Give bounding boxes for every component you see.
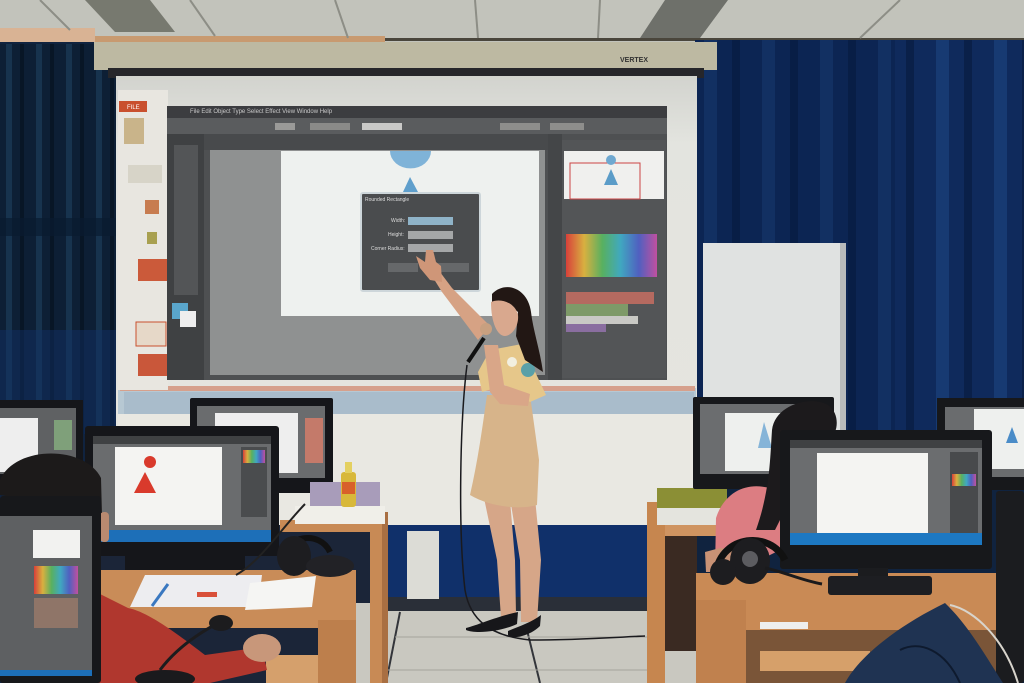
far right monitor <box>937 398 1024 490</box>
power panel on wall <box>407 531 439 599</box>
handheld microphone <box>468 323 492 362</box>
taskbar on screen <box>124 392 694 414</box>
tools panel <box>167 134 204 380</box>
canvas <box>210 150 545 375</box>
dark area under left desks <box>100 525 385 683</box>
legs <box>484 498 516 618</box>
dress <box>470 395 539 507</box>
raised arm <box>432 272 490 340</box>
projector screen housing <box>94 42 717 78</box>
papers on desk <box>130 575 316 610</box>
flip chart board <box>703 243 846 433</box>
microphone cable <box>461 365 645 640</box>
application ribbon <box>118 90 168 390</box>
hair <box>492 287 543 372</box>
hand on screen <box>416 250 442 282</box>
right panels <box>548 134 666 380</box>
water bottle <box>341 462 356 507</box>
headphones right <box>710 538 822 585</box>
swatches <box>566 292 654 332</box>
background monitor left <box>190 398 333 493</box>
right front table <box>696 573 1000 683</box>
color spectrum <box>566 234 657 277</box>
right table back <box>647 488 727 683</box>
rounded rectangle dialog: Corner Radius: <box>371 246 405 252</box>
presenter <box>416 250 645 640</box>
student right <box>705 401 837 572</box>
background monitor right <box>693 397 834 489</box>
front right monitor edge <box>996 491 1024 683</box>
projection screen <box>116 76 697 525</box>
lower curtain under screen <box>385 525 650 603</box>
illustration: red circle and triangle <box>134 456 156 493</box>
illustrator window on screen: File Edit Object Type Select Effect View Window Help <box>190 109 333 115</box>
front-left monitor with red figure <box>85 426 279 570</box>
blue handbag <box>845 603 1018 683</box>
headphones left <box>236 504 354 577</box>
brand label: VERTEX <box>620 57 648 64</box>
left curtain <box>0 44 122 434</box>
shoes <box>466 612 518 632</box>
right curtain <box>695 40 1024 435</box>
slide thumbnails <box>124 118 168 376</box>
ceiling <box>0 0 1024 44</box>
lower arm holding mic <box>484 345 530 406</box>
projection screen: FILE <box>127 105 140 111</box>
left table back <box>280 482 388 683</box>
front-left small monitor <box>0 496 101 683</box>
navigator <box>564 151 664 199</box>
rounded rectangle dialog <box>361 193 480 291</box>
floral blouse <box>478 344 546 402</box>
front-left table <box>100 570 356 683</box>
artboard <box>281 151 539 316</box>
illustrator window on screen <box>167 106 667 380</box>
front right monitor <box>780 430 992 595</box>
rounded rectangle dialog: Rounded Rectangle <box>365 197 409 203</box>
front-left desk microphone <box>135 615 233 683</box>
far left monitor <box>0 400 83 480</box>
face <box>491 301 518 336</box>
rounded rectangle dialog: Width: <box>391 218 405 224</box>
rounded rectangle dialog: Height: <box>388 232 404 238</box>
student left in red <box>0 453 281 683</box>
software panels <box>241 447 267 517</box>
floor <box>355 597 700 683</box>
